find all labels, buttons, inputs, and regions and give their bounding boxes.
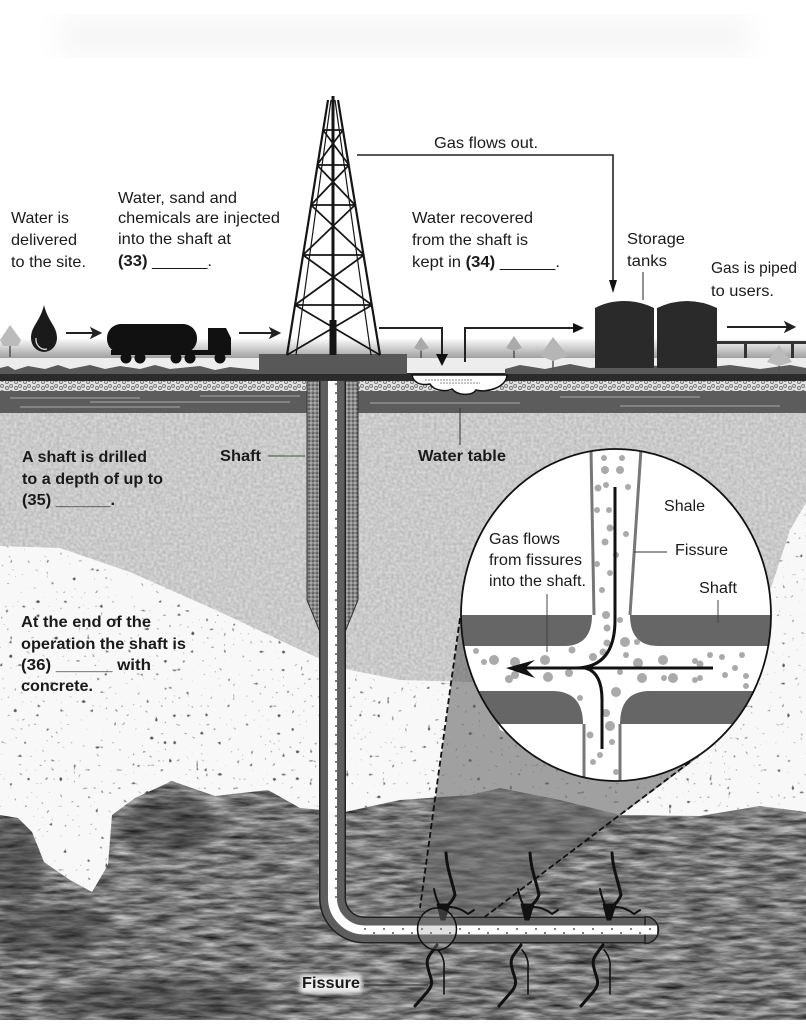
- fissure group 1: [415, 853, 474, 1006]
- layer: surface soil line: [0, 373, 806, 381]
- text: end of operation: At the end of the: [21, 614, 151, 631]
- cone shading: [420, 615, 700, 920]
- horizon haze: [0, 338, 806, 358]
- text: gas is piped: [711, 260, 797, 300]
- text: water, sand and chemicals: (33) ______.: [118, 253, 212, 270]
- fissure group 3: [581, 853, 640, 1006]
- icon: tanker truck: [107, 324, 231, 364]
- arrowhead: [506, 660, 535, 678]
- text: fissure label: Fissure: [302, 975, 360, 992]
- derrick cross bracing: [287, 130, 380, 355]
- text: shale: Shale: [664, 498, 705, 515]
- trees: [0, 325, 792, 372]
- text: water, sand and chemicals: into the shaft at: [118, 231, 232, 248]
- text: shaft drilled: A shaft is drilled: [22, 449, 147, 466]
- text: gas is piped: Gas is piped: [711, 260, 797, 277]
- tree: [414, 337, 429, 358]
- layer: ground surface: [0, 358, 806, 373]
- arrow: recovered water to storage: [465, 323, 584, 362]
- text: water, sand and chemicals: chemicals are injected: [118, 210, 280, 227]
- text: shaft label: Shaft: [220, 448, 262, 465]
- arrow: truck to derrick: [239, 329, 279, 337]
- leader: shaft: [717, 600, 719, 623]
- text: shaft: Shaft: [699, 580, 738, 597]
- leader: gas flow label: [546, 594, 548, 652]
- text: storage tanks: Storage: [627, 231, 685, 248]
- derrick legs: [287, 100, 380, 355]
- text: water is delivered: delivered: [11, 232, 77, 249]
- derrick inner legs: [296, 100, 371, 355]
- text: gas flows: from fissures: [489, 552, 582, 569]
- gas bubbles: [473, 455, 749, 775]
- drill string: [332, 96, 334, 320]
- small circle marking magnified area: [418, 908, 456, 950]
- text: shaft drilled: [22, 449, 163, 509]
- layer: white speckled sandstone: [0, 400, 806, 910]
- rounded pipe end: [645, 916, 658, 944]
- text: water recovered: from the shaft is: [412, 232, 528, 249]
- well shaft: [307, 381, 658, 944]
- inner pipe wall: [332, 381, 645, 930]
- text: end of operation: concrete.: [21, 678, 93, 695]
- layer: pebbled aquifer band: [0, 381, 806, 391]
- text: gas flows: into the shaft.: [489, 573, 586, 590]
- tree: [506, 336, 522, 358]
- shaft wall bands: [461, 615, 771, 724]
- geological layers: [0, 338, 806, 1020]
- dashed cone edges: [420, 618, 690, 922]
- faint scanned smudge at top: [60, 18, 750, 54]
- text: storage tanks: [627, 231, 685, 270]
- text: end of operation: operation the shaft is: [21, 636, 186, 653]
- tank 2: [657, 301, 717, 368]
- magnified view of fissures: [461, 449, 771, 781]
- gas pipeline: [717, 341, 806, 358]
- leader: fissure: [634, 551, 667, 553]
- icon: water drop: [31, 305, 57, 352]
- text: storage tanks: tanks: [627, 253, 667, 270]
- leader: water table: [459, 408, 461, 445]
- fissure lower walls: [584, 724, 620, 781]
- fissure group 2: [499, 853, 558, 1006]
- storage tanks: [595, 301, 717, 368]
- truck wheels: [120, 352, 226, 364]
- arrow: gas flow from derrick to tanks: [357, 155, 617, 293]
- outer casing: [307, 381, 358, 632]
- pipe core: [332, 381, 657, 930]
- text: gas flows: Gas flows: [489, 531, 560, 548]
- lens outline: [461, 449, 771, 781]
- leader: fissure label: [364, 984, 428, 986]
- pond ripples: [425, 380, 480, 383]
- text: water is delivered: to the site.: [11, 254, 86, 271]
- truck cab: [208, 328, 231, 355]
- arrow: gas into shaft: [512, 487, 713, 749]
- layer: dark shale rock: [0, 770, 806, 1020]
- text: gas flows: [489, 531, 586, 590]
- arrow: drop to truck: [66, 329, 100, 337]
- text: end of operation: [21, 614, 186, 695]
- fissure upper walls: [591, 449, 641, 615]
- water storage pond: [412, 375, 507, 394]
- text: water recovered: Water recovered: [412, 210, 533, 227]
- text: water, sand and chemicals: Water, sand and: [118, 190, 237, 207]
- grass strips: [0, 364, 806, 374]
- text: water table label: Water table: [418, 448, 506, 465]
- tree: [540, 337, 568, 372]
- text: fissure: Fissure: [675, 542, 728, 559]
- tree: [0, 325, 21, 357]
- label leader: tanks: [642, 272, 644, 300]
- pond outline: [412, 375, 507, 394]
- text: shaft drilled: to a depth of up to: [22, 471, 163, 488]
- zoom cone from fissure to magnified view: [420, 615, 700, 922]
- drilling platform: [259, 354, 407, 374]
- inner pipe outline: [332, 381, 645, 930]
- layer: grey mottled upper rock: [0, 413, 806, 682]
- arrow: waste water down into pond: [379, 328, 448, 366]
- text: water recovered: [412, 210, 560, 271]
- arrow: gas piped to users: [727, 323, 794, 331]
- truck chassis: [111, 350, 231, 355]
- text: end of operation: (36) ______ with: [21, 657, 151, 674]
- tree: [767, 345, 792, 372]
- fissures: [415, 853, 640, 1006]
- lens background: [461, 449, 771, 781]
- text: water is delivered: Water is: [11, 210, 69, 227]
- text: gas is piped: to users.: [711, 283, 774, 300]
- text: water recovered: kept in (34) ______.: [412, 254, 560, 271]
- dark rock shading: [0, 797, 280, 1020]
- halo behind fissure label: [300, 975, 362, 993]
- text: water, sand and chemicals: [118, 190, 280, 270]
- tank 1: [595, 301, 654, 368]
- layer: dark streaked rock band: [0, 391, 806, 413]
- core speckles: [328, 381, 657, 934]
- drill collar: [330, 320, 336, 355]
- icon: drilling derrick: [287, 96, 380, 355]
- text: gas flows out: Gas flows out.: [434, 135, 538, 152]
- text: water is delivered: [11, 210, 86, 271]
- truck tank: [107, 324, 197, 353]
- text: shaft drilled: (35) ______.: [22, 492, 115, 509]
- leader: shaft label: [268, 455, 305, 457]
